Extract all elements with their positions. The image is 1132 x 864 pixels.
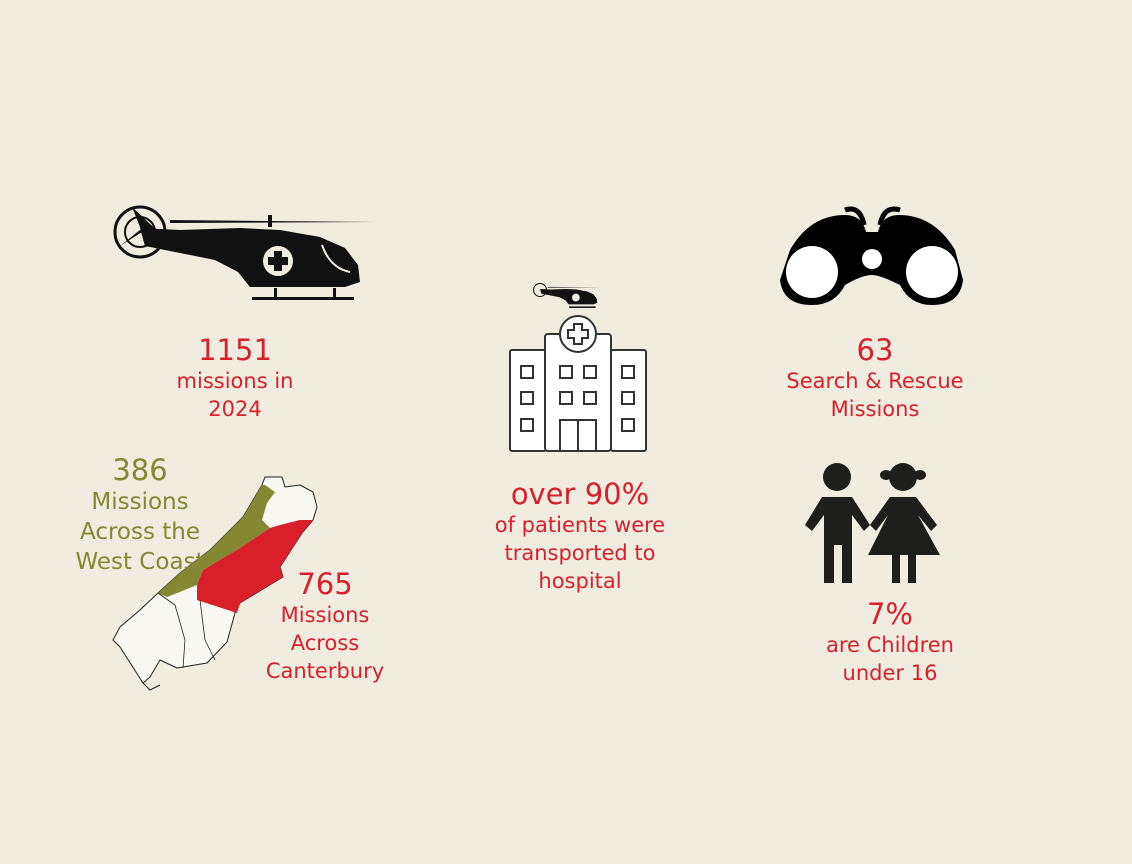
stat: 7% children: [826, 597, 954, 685]
stat: Canterbury: Across: [291, 631, 359, 655]
stat: 63 search & rescue: [786, 333, 964, 421]
stat: over 90%: [495, 477, 665, 593]
stat: Canterbury: Canterbury: [266, 659, 384, 683]
stat: West Coast: 386: [112, 453, 168, 487]
stat: 7% children: are Children: [826, 633, 954, 657]
stat: over 90%: hospital: [538, 569, 622, 593]
stat: West Coast: West Coast: [75, 549, 205, 575]
stat: 7% children: 7%: [867, 597, 913, 631]
stat: 1151 missions: 2024: [208, 397, 262, 421]
stat: West Coast: Across the: [80, 519, 200, 545]
stat: 7% children: under 16: [843, 661, 937, 685]
stat: 1151 missions: missions in: [177, 369, 293, 393]
stat: 1151 missions: 1151: [198, 333, 272, 367]
stat: 63 search & rescue: 63: [857, 333, 893, 367]
stat: over 90%: transported to: [504, 541, 656, 565]
stat: 1151 missions: [177, 333, 293, 421]
stat: Canterbury: Missions: [281, 603, 369, 627]
stat: Canterbury: 765: [297, 567, 353, 601]
stat: over 90%: over 90%: [511, 477, 649, 511]
stat: West Coast: Missions: [91, 489, 189, 515]
stat: 63 search & rescue: Missions: [831, 397, 919, 421]
stat: Canterbury: [266, 567, 384, 683]
stat: West Coast: [75, 453, 205, 575]
stat: over 90%: of patients were: [495, 513, 665, 537]
stat: 63 search & rescue: Search & Rescue: [786, 369, 964, 393]
